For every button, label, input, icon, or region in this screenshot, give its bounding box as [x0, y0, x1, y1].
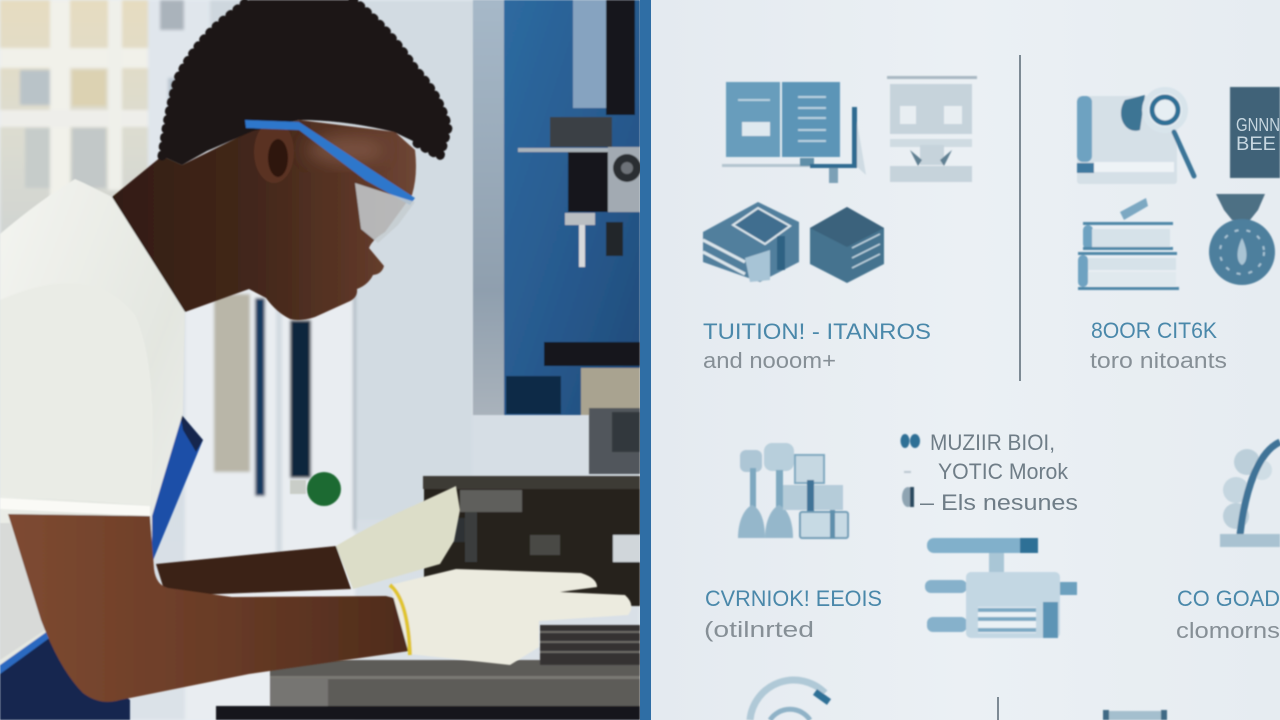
shirt	[0, 179, 185, 665]
technician figure	[0, 0, 631, 720]
list line 1: MUZIIR BIOI,	[930, 430, 1055, 455]
icon: pale workstation	[887, 76, 977, 182]
neck and face	[112, 120, 416, 320]
icon: stacked boxes	[703, 202, 799, 282]
text: consumables heading: CVRNIOK! EEOIS	[705, 586, 882, 611]
icon: medal timer	[1209, 194, 1275, 285]
icon: cube	[810, 207, 884, 283]
vertical divider	[1019, 55, 1021, 381]
bullet icons	[900, 434, 920, 507]
far glove	[336, 486, 460, 589]
text: co-op sub: clomorns	[1176, 618, 1280, 643]
panel background	[651, 0, 1280, 720]
icon: bottom device	[1103, 710, 1167, 720]
icon: dark sign: BEE	[1236, 134, 1276, 155]
near arm	[8, 514, 409, 702]
cheek highlight	[307, 136, 383, 164]
machine window	[473, 0, 641, 474]
green knob	[290, 472, 341, 506]
icon: open book	[722, 82, 866, 183]
text: co-op heading: CO GOAD	[1177, 586, 1280, 611]
workbench and vise	[216, 476, 640, 720]
icon: document with magnifier	[1077, 90, 1194, 184]
panel: cost infographic	[651, 0, 1280, 720]
bullet list	[900, 430, 1078, 515]
text: tuition sub: and nooom+	[703, 348, 836, 373]
text: tuition heading: TUITION! - ITANROS	[703, 319, 931, 344]
list line 3: – Els nesunes	[920, 490, 1078, 515]
icon: machine	[925, 538, 1077, 638]
icon: ring dial	[750, 680, 829, 720]
text: books heading: 8OOR CIT6K	[1091, 318, 1217, 343]
text: books sub: toro nitoants	[1090, 348, 1227, 373]
list line 2: YOTIC Morok	[938, 459, 1069, 484]
icon: tools	[738, 443, 848, 538]
text: consumables sub: (otilnrted	[704, 617, 814, 642]
near glove	[390, 569, 631, 665]
divider lower	[997, 697, 999, 720]
factory background	[0, 0, 640, 720]
blue divider bar	[640, 0, 651, 720]
apron	[0, 413, 203, 720]
hair	[162, 0, 448, 165]
glove cuff	[390, 585, 410, 655]
ear	[254, 121, 294, 183]
far arm	[156, 546, 351, 596]
photo: technician at a machine	[0, 0, 641, 720]
icon: gear with arc	[1220, 442, 1280, 547]
icon: book stack	[1078, 198, 1179, 290]
safety glasses	[245, 120, 415, 243]
icon: dark sign	[1230, 87, 1280, 178]
